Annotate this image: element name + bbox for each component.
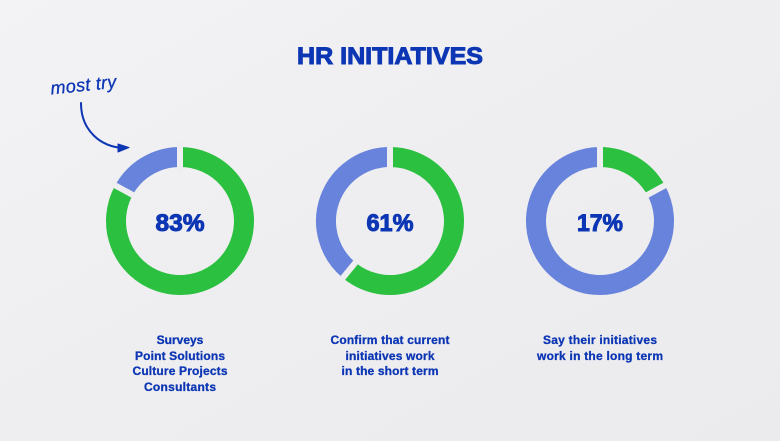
label: third donut: work in the long term <box>536 349 663 363</box>
label: first donut <box>132 333 228 394</box>
value: 83%: 83% <box>156 210 204 237</box>
annotation: most try: most try <box>50 72 118 98</box>
arrow: most try to first donut <box>81 103 129 152</box>
label: first donut: Consultants <box>144 380 216 394</box>
label: first donut: Culture Projects <box>132 364 228 378</box>
label: first donut: Surveys <box>157 333 204 347</box>
donut chart: 17% <box>536 142 669 285</box>
label: first donut: Point Solutions <box>135 349 225 363</box>
title: HR INITIATIVES <box>297 43 483 70</box>
label: second donut: Confirm that current <box>330 333 450 347</box>
label: second donut: in the short term <box>342 364 438 378</box>
donut chart: 83% <box>111 142 244 285</box>
value: 17%: 17% <box>577 210 623 237</box>
label: second donut <box>330 333 450 378</box>
value: 61%: 61% <box>366 210 414 237</box>
donut chart: 61% <box>326 142 454 285</box>
label: third donut <box>536 333 663 363</box>
label: second donut: initiatives work <box>346 349 435 363</box>
label: third donut: Say their initiatives <box>543 333 657 347</box>
